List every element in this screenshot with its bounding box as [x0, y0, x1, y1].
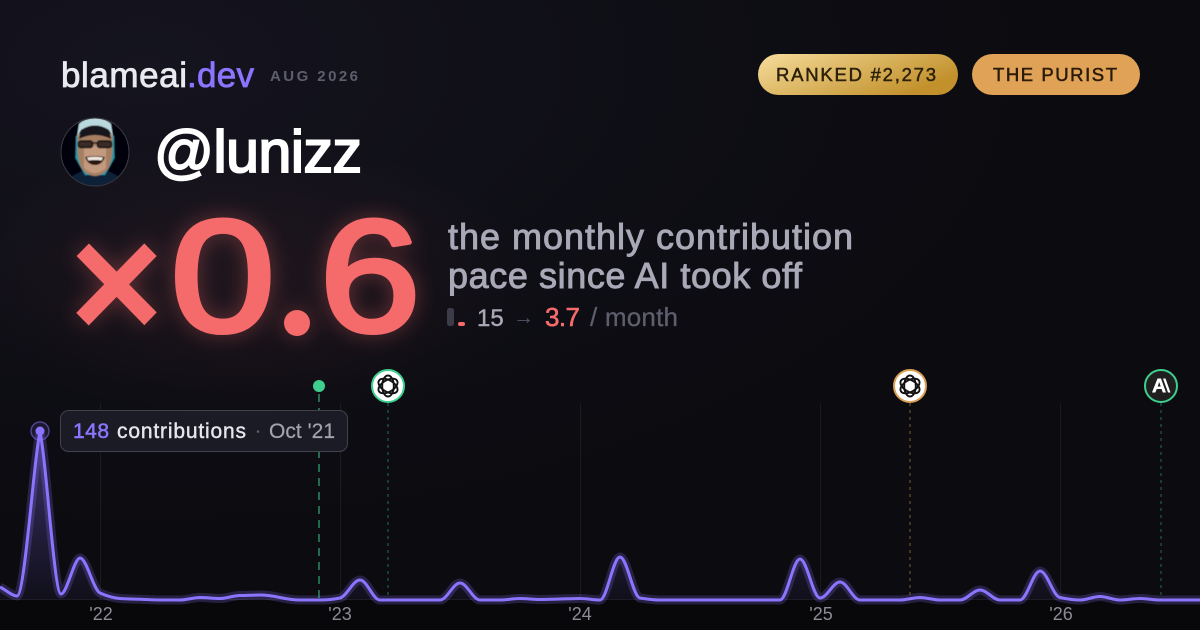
big multiplier value: 0 [171, 187, 275, 365]
milestone: OpenAI release 1 [372, 370, 404, 600]
tooltip: contributions [117, 420, 246, 443]
tooltip: 148 [73, 420, 109, 443]
tooltip: Oct '21 [269, 420, 335, 443]
date label: AUG 2026 [270, 68, 358, 85]
peak marker [31, 422, 49, 440]
avatar cap [77, 118, 113, 137]
milestone: OpenAI release 2 [894, 370, 926, 600]
big multiplier value: × [70, 191, 164, 374]
badge: rank [758, 54, 958, 95]
milestone: Anthropic release [1145, 370, 1177, 600]
avatar shoulders [72, 170, 118, 186]
milestone: AI takeoff marker [313, 380, 325, 600]
chart area [0, 432, 1200, 600]
x axis year labels: '24 [568, 604, 592, 624]
x axis year labels: '22 [89, 604, 113, 624]
big multiplier glow: 0 [171, 187, 275, 365]
tooltip [60, 410, 348, 452]
mini bar: after [458, 322, 465, 326]
brand wordmark [61, 56, 254, 95]
badge: archetype [972, 54, 1140, 95]
description: the monthly contribution [448, 216, 853, 257]
arrow: → [513, 306, 534, 329]
x axis year labels: '23 [328, 604, 352, 624]
username: @lunizz [154, 119, 362, 185]
big multiplier glow: 6 [320, 188, 420, 366]
after value: 3.7 [545, 302, 580, 332]
big multiplier value [70, 187, 420, 374]
big multiplier value: . [276, 188, 320, 366]
big multiplier glow [70, 187, 420, 374]
avatar face [78, 134, 112, 176]
unit: / month [590, 302, 678, 332]
badge: rank: RANKED #2,273 [776, 64, 936, 85]
description: pace since AI took off [448, 255, 803, 296]
big multiplier glow: × [70, 191, 164, 374]
contributions line chart [0, 432, 1200, 600]
before value: 15 [477, 305, 504, 332]
chart line [0, 432, 1200, 600]
badge: archetype: THE PURIST [993, 64, 1117, 85]
x axis year labels: '25 [809, 604, 833, 624]
avatar [60, 117, 130, 187]
x axis year labels [89, 604, 1073, 624]
x axis year labels: '26 [1049, 604, 1073, 624]
description [448, 216, 853, 296]
mini bar: before [447, 308, 454, 326]
brand wordmark: blameai [61, 56, 187, 95]
big multiplier value: 6 [320, 188, 420, 366]
chart line halo [0, 432, 1200, 600]
year gridlines [0, 403, 1200, 600]
avatar smile [85, 156, 105, 165]
avatar glasses [78, 141, 112, 148]
avatar cyan rim light [76, 136, 114, 175]
brand wordmark: .dev [187, 56, 254, 95]
pace comparison row [447, 302, 678, 332]
